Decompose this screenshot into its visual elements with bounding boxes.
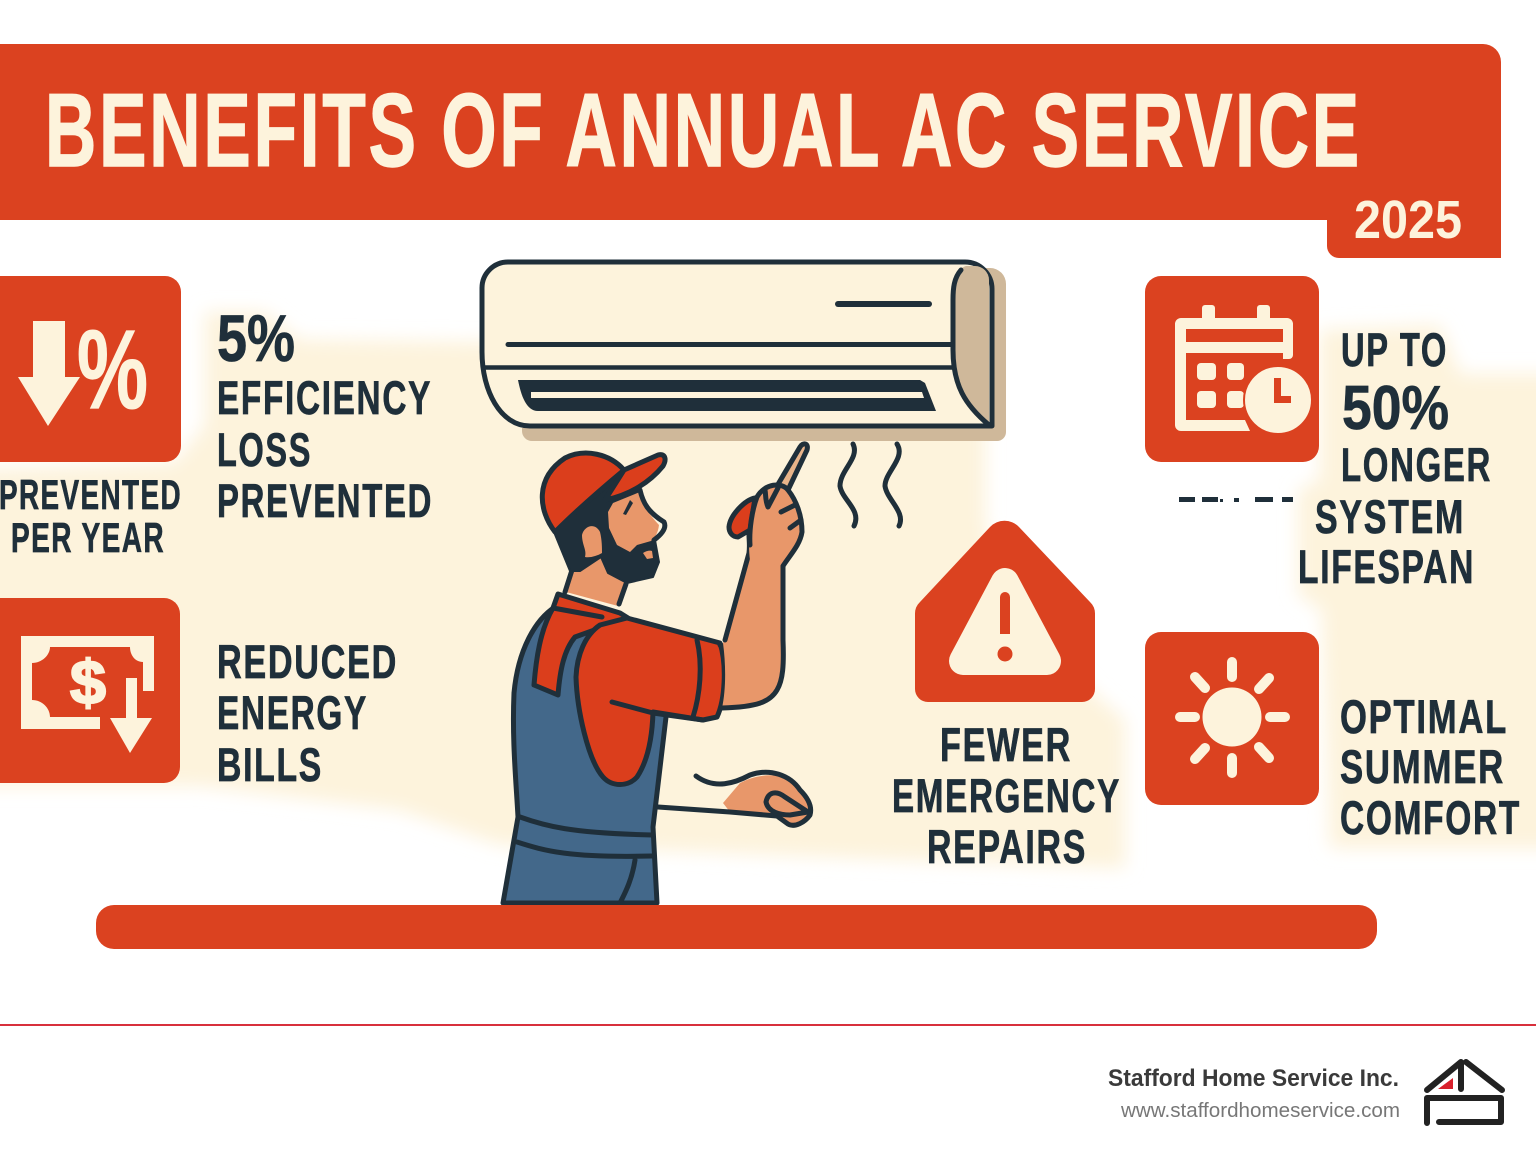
footer rule — [0, 1024, 1536, 1026]
text: up to 50% longer system lifespan: UP TO — [1341, 323, 1448, 376]
eye — [623, 500, 633, 515]
artifact dashes — [1179, 497, 1293, 502]
belt — [517, 817, 652, 903]
icon: calendar clock — [1145, 276, 1319, 462]
unit body — [482, 262, 992, 426]
text: optimal summer comfort — [1340, 690, 1521, 844]
text: reduced energy bills: BILLS — [217, 738, 323, 791]
icon: money down: $ — [70, 649, 106, 718]
text: up to 50% longer system lifespan: 50% — [1342, 374, 1449, 443]
text: reduced energy bills — [217, 635, 398, 791]
shirt collar and strap — [534, 594, 628, 695]
shirt sleeve — [576, 618, 724, 784]
technician — [503, 444, 811, 903]
cap — [542, 453, 624, 532]
overalls — [503, 607, 666, 903]
text: 5% efficiency loss prevented — [217, 301, 433, 527]
icon: percent down: % — [77, 307, 148, 432]
lower hand — [723, 775, 810, 826]
mouth — [643, 551, 653, 559]
icon: warning house — [915, 521, 1095, 702]
year: 2025 — [1354, 190, 1462, 250]
hair and beard — [554, 476, 659, 583]
text: prevented per year — [0, 471, 182, 561]
air conditioner unit — [482, 262, 1006, 526]
footer company name: Stafford Home Service Inc. — [1108, 1065, 1399, 1092]
text: reduced energy bills: REDUCED — [217, 635, 398, 688]
face — [608, 492, 659, 552]
text: prevented per year: PER YEAR — [11, 514, 165, 561]
icon: sun — [1145, 632, 1319, 805]
side panel — [953, 266, 989, 424]
icon: percent down — [0, 276, 181, 462]
cap brim — [605, 455, 665, 500]
nose outline — [640, 490, 665, 540]
header banner — [0, 44, 1501, 258]
text: 5% efficiency loss prevented: PREVENTED — [217, 474, 433, 527]
text: 5% efficiency loss prevented: 5% — [217, 301, 295, 375]
text: up to 50% longer system lifespan — [1298, 323, 1492, 593]
text: fewer emergency repairs — [892, 718, 1121, 873]
ear — [582, 526, 602, 557]
text: prevented per year: PREVENTED — [0, 471, 182, 518]
text: 5% efficiency loss prevented: LOSS — [217, 423, 312, 476]
text: up to 50% longer system lifespan: SYSTEM — [1315, 490, 1465, 543]
text: fewer emergency repairs: REPAIRS — [927, 820, 1087, 873]
neck — [566, 557, 625, 606]
text: 5% efficiency loss prevented: EFFICIENCY — [217, 371, 432, 424]
icon: money down — [0, 598, 180, 783]
text: fewer emergency repairs: FEWER — [940, 718, 1072, 771]
bottom bar — [96, 905, 1377, 949]
text: reduced energy bills: ENERGY — [217, 686, 368, 739]
footer logo — [1427, 1062, 1502, 1123]
hand — [749, 485, 802, 566]
raised arm — [722, 545, 785, 708]
cream background wash — [0, 300, 1536, 868]
tool — [777, 444, 807, 490]
air waves — [840, 444, 856, 526]
red cloth — [729, 498, 755, 537]
text: fewer emergency repairs: EMERGENCY — [892, 769, 1121, 822]
vent — [518, 380, 936, 411]
unit shadow — [522, 268, 1006, 441]
footer website: www.staffordhomeservice.com — [1120, 1100, 1400, 1122]
